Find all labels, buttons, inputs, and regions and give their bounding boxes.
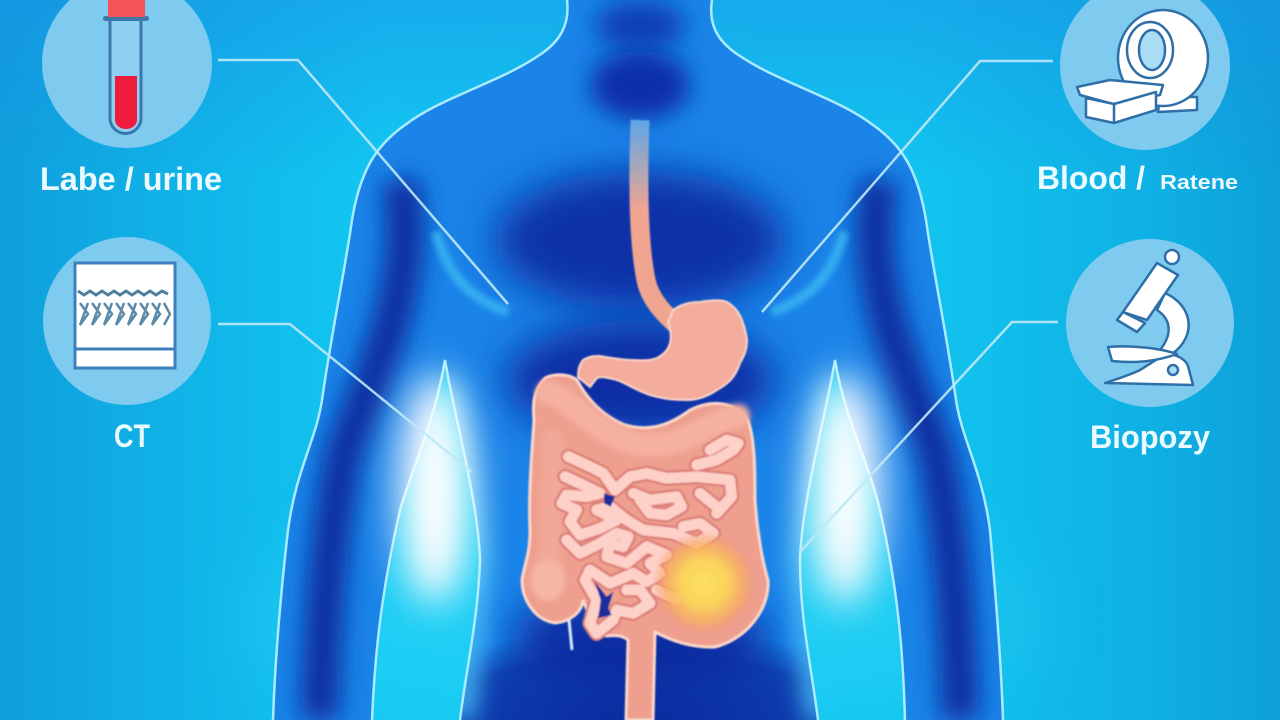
label	[1037, 160, 1238, 196]
large intestine and rectum	[522, 375, 768, 720]
glow beside waist	[399, 375, 881, 605]
stomach	[578, 300, 747, 400]
icon: test tube	[103, 0, 149, 134]
label: Labe / urine	[40, 161, 222, 197]
human body silhouette	[272, 0, 1004, 720]
digestive system	[522, 120, 768, 720]
icon: scan sheet	[75, 263, 175, 368]
appendix	[569, 620, 572, 650]
label: CT	[114, 418, 150, 454]
esophagus	[639, 120, 680, 328]
label: Ratene	[1160, 172, 1238, 194]
icon: MRI scanner	[1077, 10, 1208, 123]
gaps between loops	[595, 493, 615, 618]
transverse colon highlight	[548, 392, 738, 445]
label: Biopozy	[1090, 419, 1210, 455]
label: Blood /	[1037, 160, 1145, 196]
inflamed area	[652, 531, 756, 635]
panel: biopsy	[1066, 239, 1234, 455]
panel: CT	[43, 237, 211, 454]
small intestine	[562, 440, 738, 633]
icon: microscope	[1105, 250, 1193, 385]
connector lines	[218, 60, 1058, 552]
cecum shading	[530, 560, 566, 600]
panel: labs / urine	[40, 0, 222, 197]
panel: blood / ratene	[1037, 0, 1238, 196]
ascending colon shading	[548, 440, 553, 590]
